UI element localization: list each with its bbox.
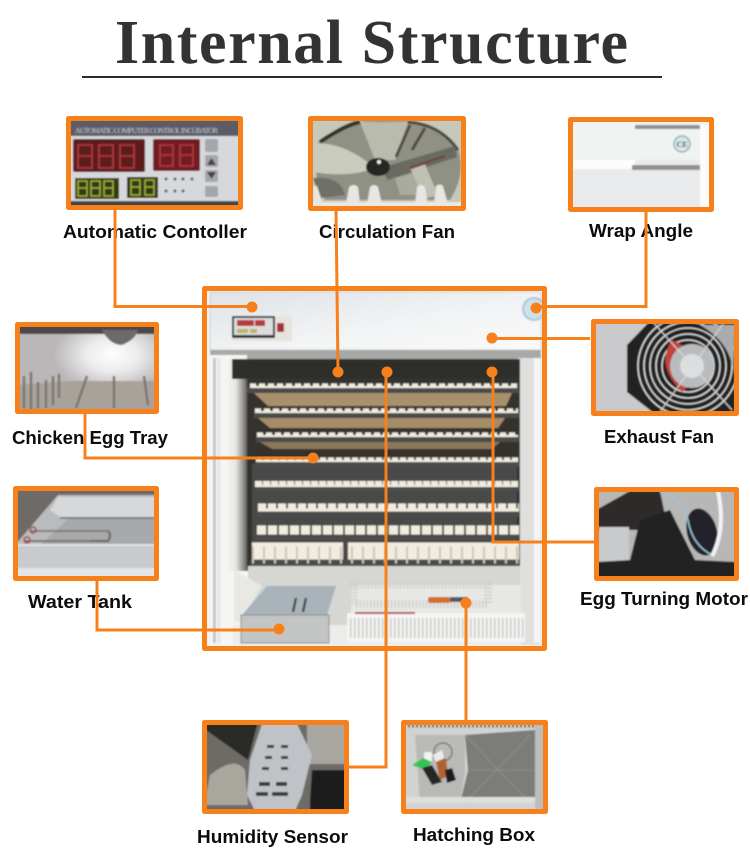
- frame: circulation fan: [310, 118, 464, 208]
- label: egg turning motor: Egg Turning Motor: [580, 589, 748, 609]
- hatching basket in cabinet: [347, 585, 525, 642]
- frame: automatic controller: [68, 118, 240, 208]
- frame: exhaust fan: [594, 322, 736, 414]
- panel: water tank photo: [18, 491, 154, 576]
- panel: wrap angle photo: [573, 122, 709, 207]
- label: water tank: Water Tank: [28, 592, 133, 612]
- connector: wrap angle: [530, 210, 646, 314]
- frame: water tank: [16, 488, 156, 578]
- frame: chicken egg tray: [18, 324, 156, 412]
- panel: automatic controller photo: AUTOMATIC COMPUTER CONTROL INCUBATOR: [75, 126, 218, 135]
- label: exhaust fan: Exhaust Fan: [604, 427, 714, 447]
- egg tray shelves: [247, 385, 520, 566]
- panel: humidity sensor photo: [207, 725, 344, 809]
- incubator lower compartment: [233, 566, 521, 645]
- connector: exhaust fan: [486, 332, 590, 344]
- label: chicken egg tray: Chicken Egg Tray: [12, 428, 168, 448]
- panel: egg turning motor photo: [599, 492, 734, 576]
- panel: exhaust fan photo: [596, 324, 734, 411]
- frame: wrap angle: [570, 120, 712, 210]
- connector: chicken egg tray: [85, 412, 318, 464]
- frame: hatching box: [404, 722, 546, 812]
- connector: egg turning motor: [486, 366, 594, 542]
- connector: circulation fan: [332, 209, 344, 378]
- incubator top control panel: [210, 292, 545, 359]
- connector: hatching box: [460, 598, 472, 720]
- label: wrap angle: Wrap Angle: [589, 221, 693, 241]
- panel: wrap angle photo: CE: [676, 140, 688, 149]
- cabinet side walls: [210, 355, 541, 645]
- connector: automatic controller: [115, 209, 258, 312]
- panel: central incubator photo: [204, 288, 545, 649]
- panel: circulation fan photo: [313, 121, 461, 206]
- title: Internal Structure: [115, 9, 628, 77]
- panel: chicken egg tray photo: [20, 327, 154, 409]
- water tank in cabinet: [241, 586, 336, 643]
- frame: egg turning motor: [596, 490, 736, 578]
- panel: automatic controller photo: [71, 121, 238, 205]
- label: automatic controller: Automatic Contoller: [63, 222, 247, 242]
- panel: hatching box photo: [406, 725, 543, 809]
- connector: water tank: [97, 579, 284, 634]
- label: humidity sensor: Humidity Sensor: [197, 827, 348, 847]
- label: circulation fan: Circulation Fan: [319, 222, 455, 242]
- frame: central incubator: [204, 288, 544, 648]
- connector: humidity sensor: [349, 366, 392, 767]
- incubator interior: [232, 359, 520, 570]
- frame: humidity sensor: [204, 722, 346, 812]
- label: hatching box: Hatching Box: [413, 825, 535, 845]
